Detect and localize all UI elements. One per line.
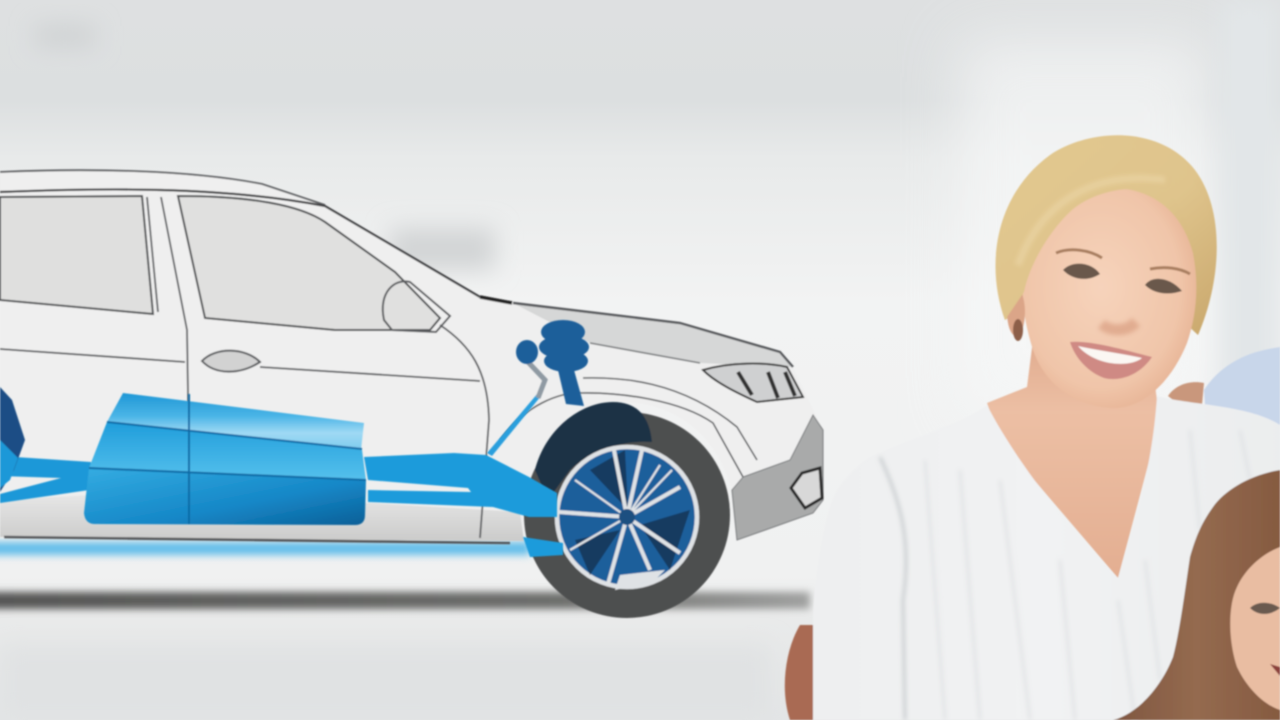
hair back [995,135,1217,335]
car outlines [0,170,793,543]
rear suspension link [0,440,18,488]
grey strut [528,362,545,398]
battery and drivetrain [0,320,589,557]
rim [557,447,697,587]
eyebrows [1056,250,1190,274]
girl's eye [1250,603,1280,614]
teeth [1078,346,1142,364]
battery bottom [84,468,366,525]
blouse [813,396,1280,720]
headlight [703,364,803,402]
lower sill [0,495,524,541]
nose shadow [1098,318,1140,335]
left drive bars [0,456,91,503]
spokes [559,450,680,584]
fog lamp [791,468,822,508]
rear window [0,196,153,314]
eyes [1063,264,1182,293]
girl's face [1230,547,1280,710]
rear suspension [0,387,25,492]
smile [1070,342,1152,379]
blue floor glow [0,403,530,555]
blouse folds [925,430,1250,720]
battery middle [89,422,366,480]
girl's mouth [1270,664,1280,676]
tire [524,412,730,618]
bright rim patch [615,570,665,590]
hood shade [513,303,793,367]
family photo [785,135,1280,720]
woman [813,135,1280,720]
front suspension link [487,393,541,456]
fringe [997,143,1215,335]
earring [1013,319,1023,341]
car body [0,170,823,541]
man's hand [1168,382,1204,405]
ear [1007,288,1025,336]
girl's hair [1113,470,1280,720]
dark rim patches [575,450,690,575]
arm behind [785,625,815,720]
front wheel [524,402,730,618]
car [0,170,823,543]
man's shirt [1204,347,1280,425]
neck [987,340,1160,578]
sleeve crease [880,457,906,720]
front window [178,196,440,330]
hair highlight [1018,178,1165,265]
girl [1113,470,1280,720]
battery top [107,393,364,450]
hub [619,509,635,525]
wheel arch liner [535,402,652,500]
face [1023,188,1196,408]
floor shadow [0,592,810,609]
battery seams [89,394,366,524]
lower bumper [732,415,823,540]
front spring [516,320,589,406]
right drive bars [364,453,557,517]
lower drive bar [523,537,563,557]
